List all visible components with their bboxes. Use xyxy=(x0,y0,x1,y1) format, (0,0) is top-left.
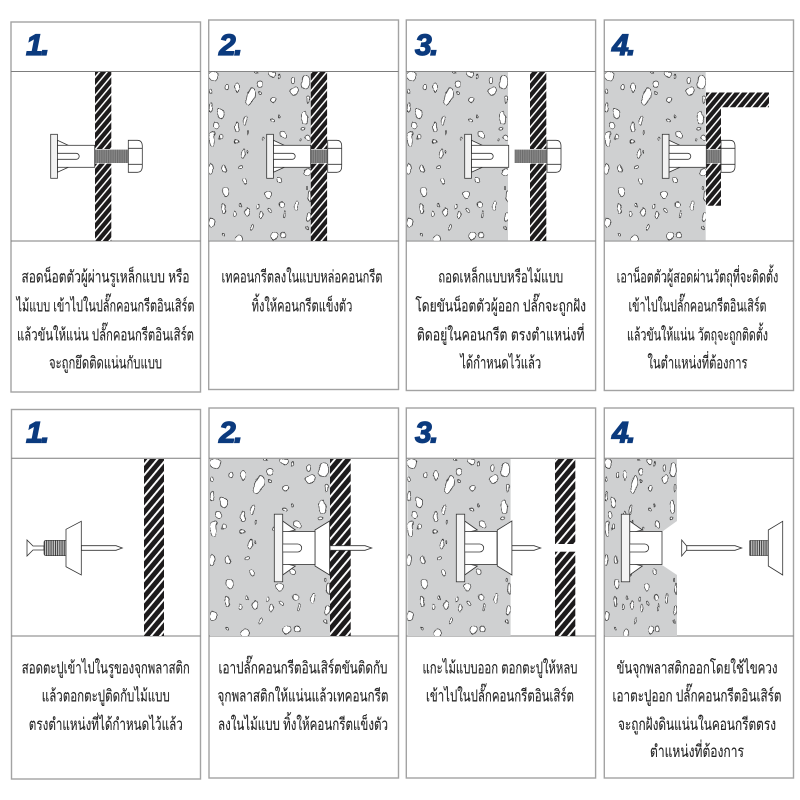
step text: จะถูกยึดติดแน่นกับแบบ xyxy=(49,354,162,374)
bolt nut xyxy=(721,140,735,172)
panel: lower step 3 xyxy=(406,408,596,778)
step text: ติดอยู่ในคอนกรีต ตรงตำแหน่งที่ xyxy=(417,322,585,346)
step text: แล้วตอกตะปูติดกับไม้แบบ xyxy=(42,686,170,707)
step text: ลงในไม้แบบ ทิ้งให้คอนกรีตแข็งตัว xyxy=(218,712,388,734)
step text: สอดตะปูเข้าไปในรูของจุกพลาสติก xyxy=(22,657,190,678)
step number: 2. xyxy=(218,29,241,62)
step text xyxy=(415,266,586,372)
step text: ไม้แบบ เข้าไปในปลั๊กคอนกรีตอินเสิร์ต xyxy=(15,292,195,316)
threaded bolt xyxy=(514,149,547,163)
step text xyxy=(422,657,578,706)
panel: lower step 4 xyxy=(604,408,794,778)
step text: ถอดเหล็กแบบหรือไม้แบบ xyxy=(438,266,563,287)
step text xyxy=(218,654,388,734)
step number: 1. xyxy=(26,29,48,62)
insert anchor xyxy=(274,514,315,582)
step number: 3. xyxy=(415,29,437,62)
concrete with aggregate xyxy=(209,72,311,241)
panel: upper step 2 xyxy=(209,20,398,390)
concrete with aggregate xyxy=(407,459,511,636)
insert anchor xyxy=(621,514,662,582)
step text: จุกพลาสติกให้แน่นแล้วเทคอนกรีต xyxy=(218,686,388,707)
step text: ทิ้งให้คอนกรีตแข็งตัว xyxy=(252,294,352,316)
removed screw coil xyxy=(749,540,768,556)
insert anchor xyxy=(662,134,706,178)
step text: โดยขันน็อตตัวผู้ออก ปลั๊กจะถูกฝัง xyxy=(415,292,586,316)
L-shaped fixture hatch xyxy=(706,92,769,206)
step text: สอดน็อตตัวผู้ผ่านรูเหล็กแบบ หรือ xyxy=(22,266,190,288)
step text: เอาปลั๊กคอนกรีตอินเสิร์ตขันติดกับ xyxy=(218,654,388,677)
insert anchor xyxy=(267,134,311,178)
bolt nut xyxy=(328,140,342,172)
step text: แล้วขันให้แน่น ปลั๊กคอนกรีตอินเสิร์ต xyxy=(17,322,194,344)
formwork hatch band, upper part xyxy=(555,459,575,544)
concrete with aggregate xyxy=(604,72,706,241)
nail with screw coil and plastic plug xyxy=(27,521,122,575)
removed nail xyxy=(682,540,742,556)
threaded bolt xyxy=(94,149,128,163)
formwork hatch band xyxy=(144,459,164,636)
step number: 2. xyxy=(218,417,241,450)
panel: lower step 2 xyxy=(209,408,398,778)
step text xyxy=(22,657,190,734)
plastic plug xyxy=(497,521,512,575)
formwork hatch band xyxy=(530,72,546,241)
step text xyxy=(15,266,195,374)
step text xyxy=(617,265,778,372)
step number: 3. xyxy=(415,417,437,450)
concrete with aggregate xyxy=(605,459,677,636)
nail tip xyxy=(512,546,541,550)
bolt nut xyxy=(547,140,561,172)
step number: 1. xyxy=(26,417,48,450)
step text: เข้าไปในปลั๊กคอนกรีตอินเสิร์ต xyxy=(426,683,574,706)
step text: ตำแหน่งที่ต้องการ xyxy=(650,739,744,761)
insert anchor xyxy=(456,514,497,582)
panel: upper step 4 xyxy=(604,20,794,390)
nail tip xyxy=(330,546,372,550)
insert anchor xyxy=(465,134,509,178)
step text xyxy=(222,267,382,316)
broken-out concrete notch xyxy=(662,521,677,575)
formwork hatch band xyxy=(330,459,351,636)
step text: ได้กำหนดไว้แล้ว xyxy=(459,352,541,372)
removed plastic plug xyxy=(768,521,783,575)
insert anchor xyxy=(51,134,95,178)
formwork hatch band xyxy=(311,72,327,241)
step number: 4. xyxy=(611,29,634,62)
bolt nut xyxy=(128,140,142,172)
threaded bolt xyxy=(706,149,721,163)
step text: แกะไม้แบบออก ตอกตะปูให้หลบ xyxy=(422,657,578,678)
step text: เทคอนกรีตลงในแบบหล่อคอนกรีต xyxy=(222,267,382,287)
panel: upper step 3 xyxy=(406,20,596,390)
concrete with aggregate xyxy=(407,72,508,241)
plastic plug xyxy=(315,521,330,575)
panel: lower step 1 xyxy=(12,410,200,779)
threaded bolt xyxy=(310,149,328,163)
concrete with aggregate xyxy=(210,459,330,636)
formwork hatch band xyxy=(95,72,111,241)
step text: ในตำแหน่งที่ต้องการ xyxy=(648,350,748,372)
panel: upper step 1 xyxy=(11,22,200,392)
step text xyxy=(612,657,782,761)
step text: ตรงตำแหน่งที่ได้กำหนดไว้แล้ว xyxy=(29,712,183,734)
formwork hatch band, lower part xyxy=(555,552,575,636)
step number: 4. xyxy=(611,417,634,450)
